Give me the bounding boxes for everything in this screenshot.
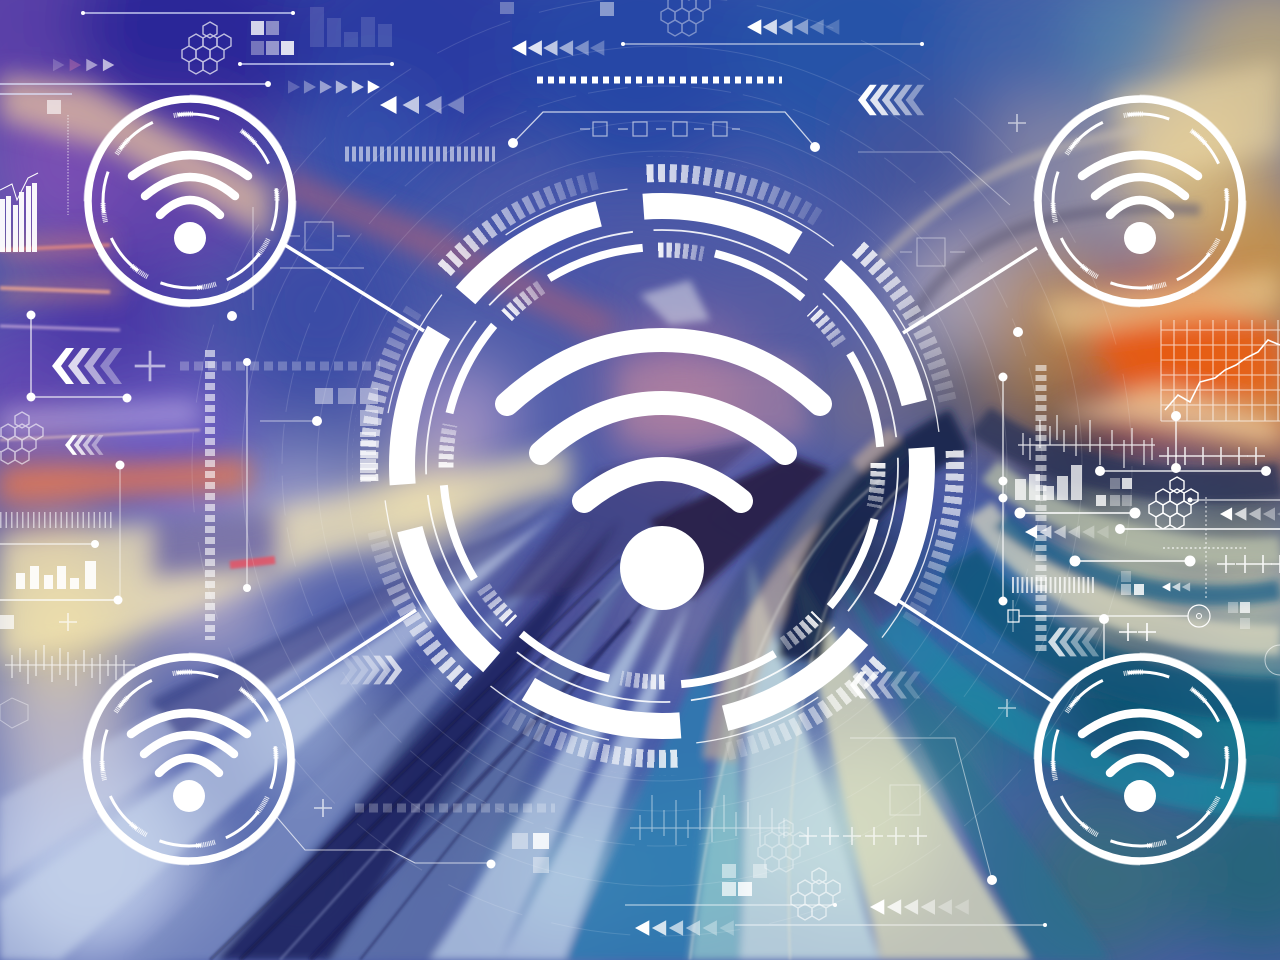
chart grid <box>1161 320 1280 421</box>
satellite wifi badge: bottom right <box>1034 653 1246 865</box>
central hub ring <box>383 187 941 745</box>
satellite wifi badge: top right <box>1034 95 1246 307</box>
thin middle arcs <box>426 230 898 702</box>
outer fading tick ring <box>352 156 972 776</box>
thick ring segments <box>402 206 922 726</box>
HUD cluster: left middle <box>0 310 380 728</box>
HUD cluster: right middle <box>998 320 1280 717</box>
HUD cluster: bottom <box>275 656 1047 936</box>
thin outer arcs <box>383 187 941 745</box>
satellite wifi badge: top left <box>84 95 296 307</box>
satellite wifi badge: bottom left <box>83 653 295 865</box>
medium inner arcs <box>443 247 881 685</box>
central wifi icon <box>507 340 820 610</box>
HUD cluster: top left <box>0 7 495 321</box>
inner fading tick clusters <box>438 242 886 690</box>
connector lines from hub to satellites <box>278 245 1052 701</box>
HUD cluster: top centre <box>500 0 1026 266</box>
